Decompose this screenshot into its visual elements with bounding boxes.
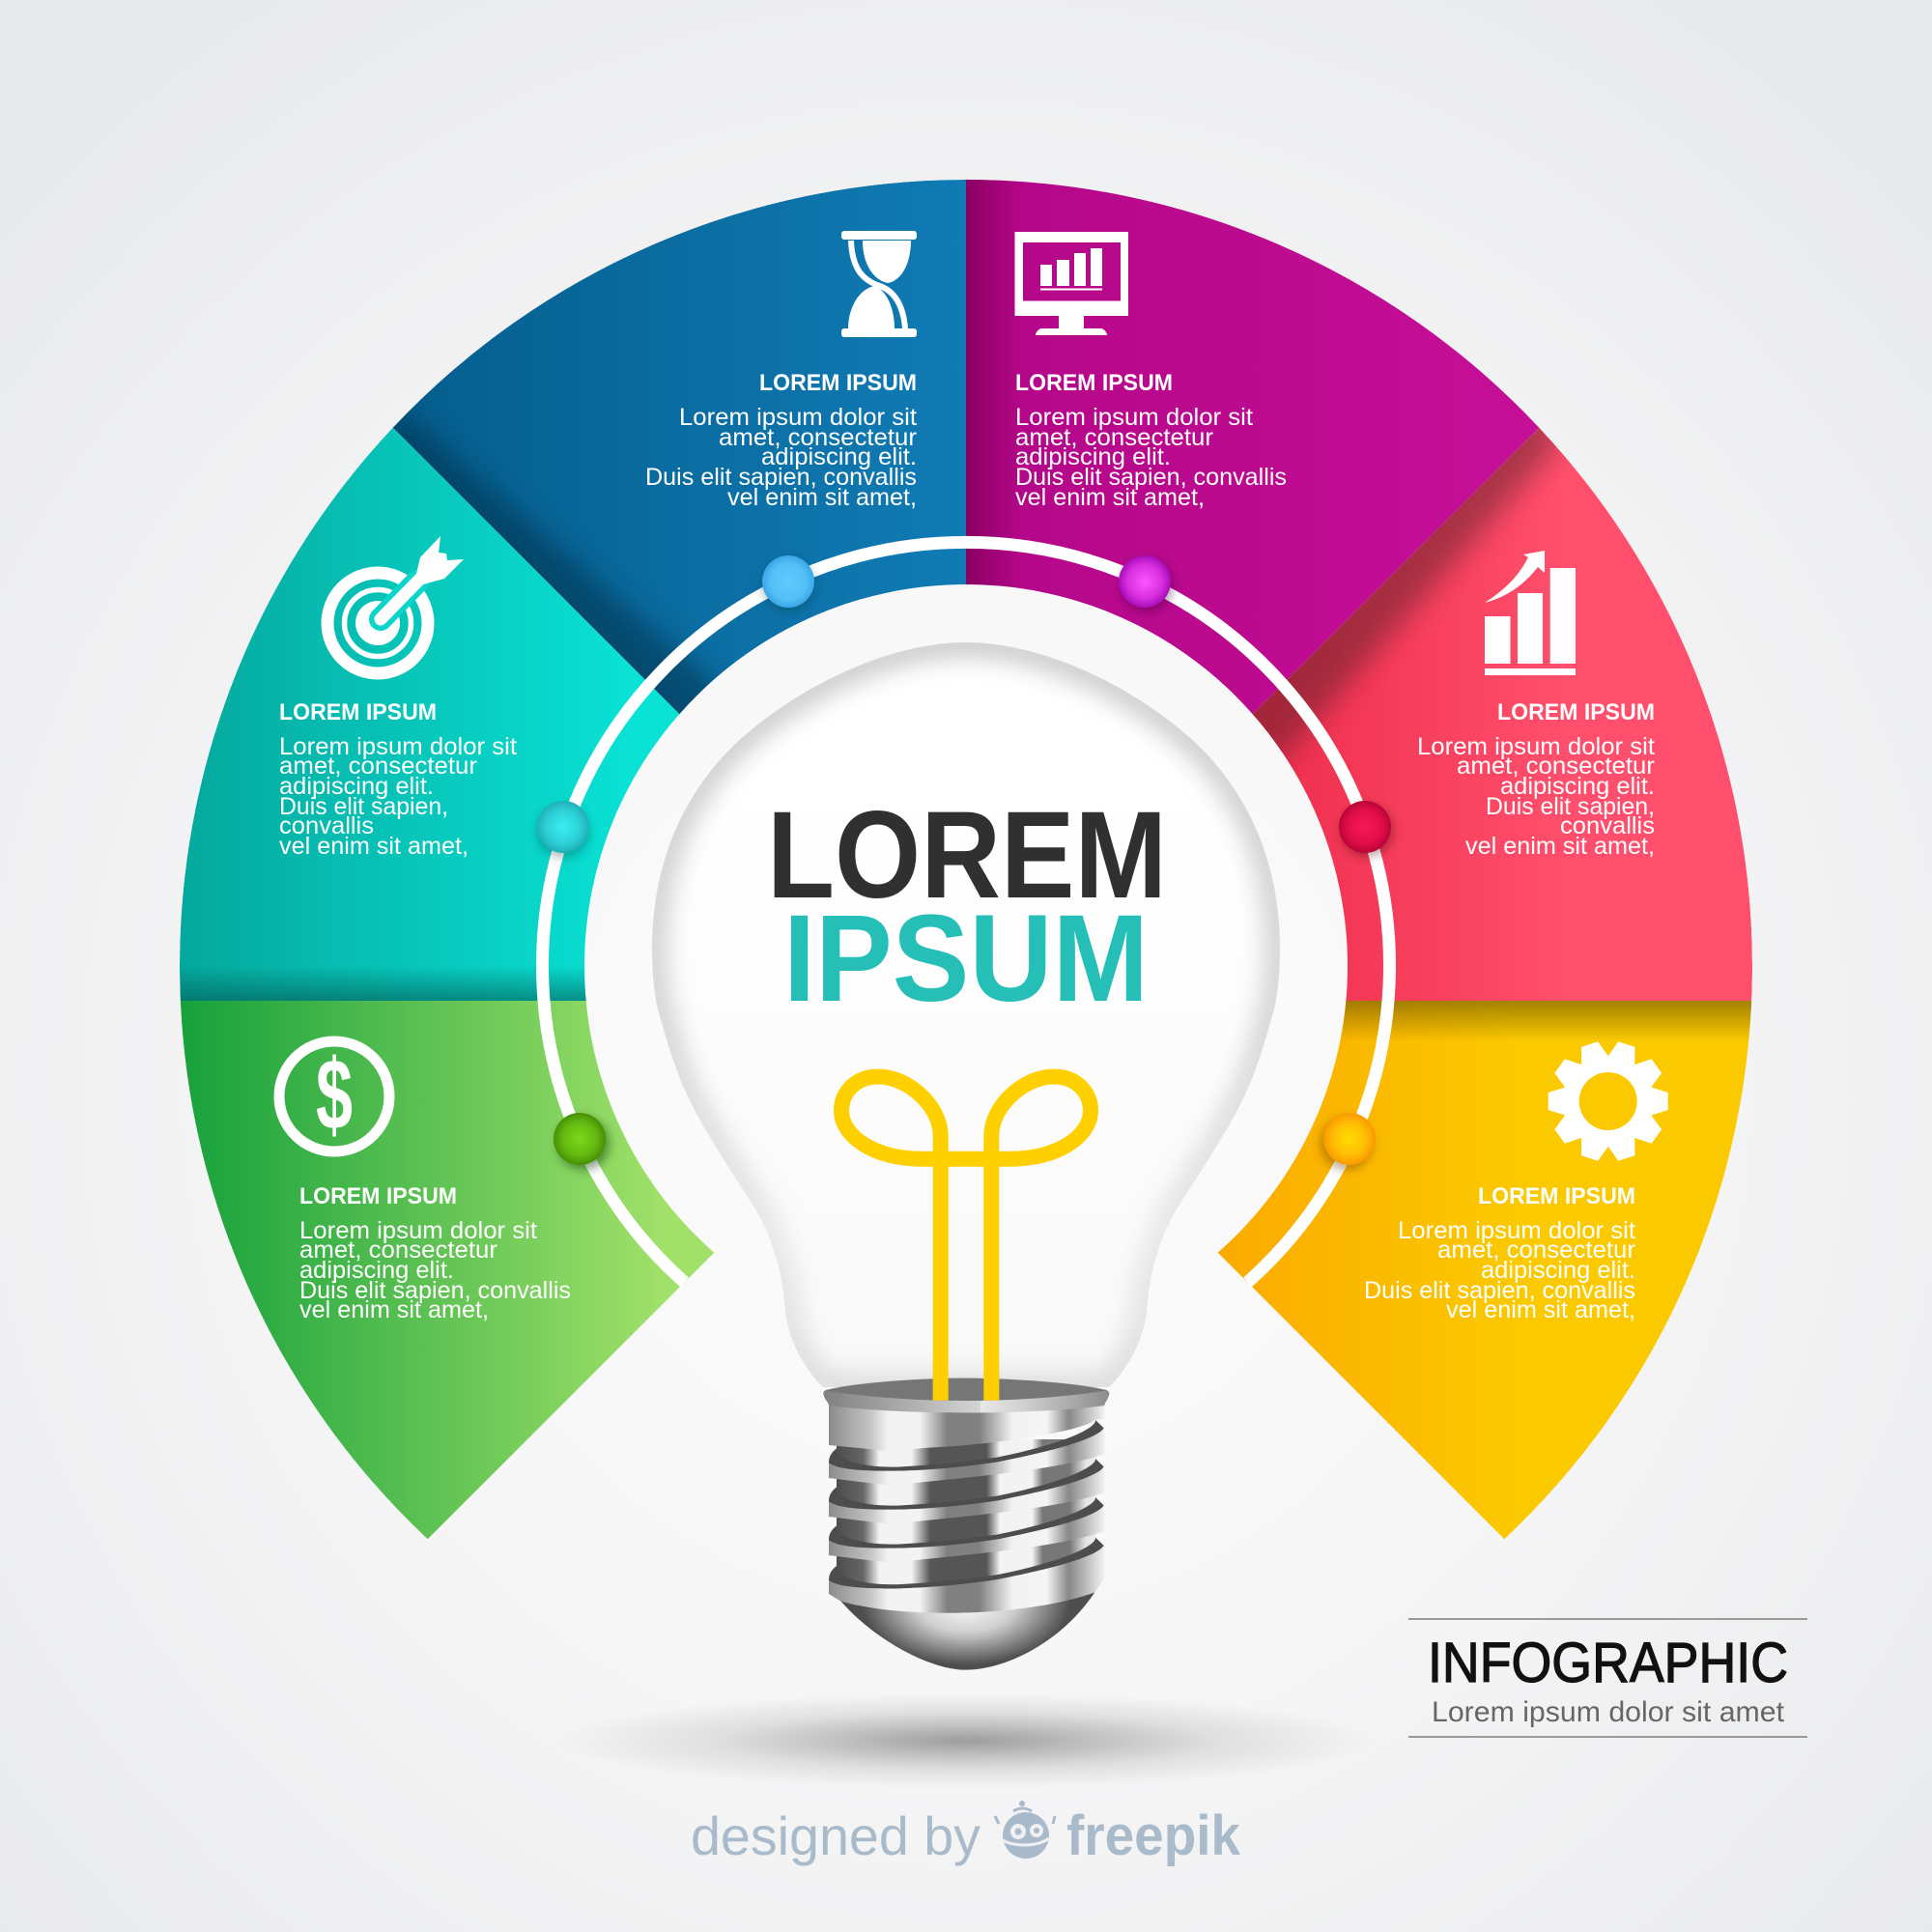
recess <box>837 1439 1095 1591</box>
dot: yellow <box>1321 1113 1376 1170</box>
panel: yellow content <box>1364 1039 1668 1323</box>
dots on ring <box>537 555 1393 1170</box>
body text <box>279 733 517 860</box>
body text: Lorem ipsum dolor sit <box>1398 1217 1635 1244</box>
icon: monitor <box>1014 232 1128 335</box>
label heading: INFOGRAPHIC <box>1428 1632 1788 1694</box>
body text <box>1417 733 1655 860</box>
panel: magenta content <box>1014 232 1287 511</box>
body text: vel enim sit amet, <box>1465 833 1655 860</box>
body text: Duis elit sapien, <box>1486 793 1655 820</box>
filament ends <box>933 1372 949 1401</box>
segment: magenta <box>966 180 1540 715</box>
dot: red <box>1339 801 1393 857</box>
body text: Duis elit sapien, convallis <box>1364 1277 1635 1304</box>
body text: adipiscing elit. <box>279 773 434 800</box>
credit: designed by freepik <box>691 1801 1241 1867</box>
panel: green content <box>279 1039 571 1323</box>
body text: Duis elit sapien, convallis <box>645 464 917 491</box>
credit: designed by freepik: freepik <box>1066 1804 1241 1867</box>
body top <box>829 1404 1104 1451</box>
body text: Lorem ipsum dolor sit <box>1417 733 1655 760</box>
title word: IPSUM: IPSUM <box>783 890 1149 1028</box>
icon: target with arrow <box>327 536 464 673</box>
body text: adipiscing elit. <box>1500 773 1655 800</box>
body text: vel enim sit amet, <box>727 484 917 511</box>
icon: dollar coin: $ <box>316 1039 353 1151</box>
body text: Lorem ipsum dolor sit <box>1015 404 1253 431</box>
credit: designed by freepik: designed by <box>691 1805 980 1866</box>
body text <box>299 1217 571 1323</box>
label subtitle: Lorem ipsum dolor sit amet <box>1432 1696 1785 1728</box>
semicircle wedge segments <box>180 180 1758 1539</box>
light bulb <box>652 642 1280 1670</box>
body text: vel enim sit amet, <box>279 833 469 860</box>
body text: Duis elit sapien, convallis <box>1015 464 1287 491</box>
segment: teal <box>180 427 680 1001</box>
icon: dollar coin <box>279 1039 389 1151</box>
body text <box>645 404 917 511</box>
body text: amet, consectetur <box>279 753 477 780</box>
icon: hourglass <box>841 231 917 337</box>
threads <box>829 1420 1104 1613</box>
body text: adipiscing elit. <box>1481 1257 1635 1284</box>
body text: amet, consectetur <box>1437 1236 1635 1264</box>
heading: LOREM IPSUM <box>1497 699 1655 725</box>
body text: vel enim sit amet, <box>1015 484 1205 511</box>
body text: amet, consectetur <box>299 1236 497 1264</box>
body text: convallis <box>1560 812 1655 839</box>
segment: yellow <box>1217 1001 1752 1540</box>
body text: amet, consectetur <box>1015 424 1213 451</box>
body text: Lorem ipsum dolor sit <box>679 404 917 431</box>
body text: Duis elit sapien, <box>279 793 448 820</box>
body text: convallis <box>279 812 374 839</box>
icon: growth chart <box>1485 551 1576 675</box>
body text: adipiscing elit. <box>761 443 917 470</box>
dome tip <box>838 1591 1095 1670</box>
dot: magenta <box>1119 555 1173 611</box>
dot: green <box>554 1113 610 1170</box>
body text: amet, consectetur <box>719 424 917 451</box>
heading: LOREM IPSUM <box>1015 370 1173 396</box>
screw base <box>823 1372 1109 1670</box>
bulb glass <box>652 642 1280 1387</box>
panel: blue content <box>645 231 917 511</box>
heading: LOREM IPSUM <box>759 370 917 396</box>
infographic label <box>1408 1618 1807 1738</box>
heading: LOREM IPSUM <box>1478 1183 1635 1209</box>
dot: teal <box>537 801 589 858</box>
panel: red content <box>1417 551 1655 860</box>
collar <box>823 1378 1109 1412</box>
ground shadow <box>555 1692 1377 1789</box>
white ring arc <box>543 542 1390 1282</box>
segment: green <box>180 1001 715 1540</box>
heading: LOREM IPSUM <box>279 699 437 725</box>
body text <box>1364 1217 1635 1323</box>
body text <box>1015 404 1287 511</box>
title <box>767 786 1167 1028</box>
filament <box>841 1076 1091 1401</box>
body text: Lorem ipsum dolor sit <box>279 733 517 760</box>
segment: red <box>1252 427 1752 1001</box>
segment: blue <box>392 180 966 715</box>
panel: teal content <box>279 536 517 860</box>
icon: gear <box>1548 1039 1668 1163</box>
heading: LOREM IPSUM <box>299 1183 457 1209</box>
body text: adipiscing elit. <box>299 1257 454 1284</box>
body text: Duis elit sapien, convallis <box>299 1277 571 1304</box>
body text: adipiscing elit. <box>1015 443 1171 470</box>
body text: Lorem ipsum dolor sit <box>299 1217 537 1244</box>
body text: amet, consectetur <box>1457 753 1655 780</box>
icon: freepik robot <box>995 1801 1055 1859</box>
dot: blue <box>762 555 814 611</box>
body text: vel enim sit amet, <box>1446 1296 1635 1323</box>
body text: vel enim sit amet, <box>299 1296 489 1323</box>
title word: LOREM: LOREM <box>767 786 1167 924</box>
